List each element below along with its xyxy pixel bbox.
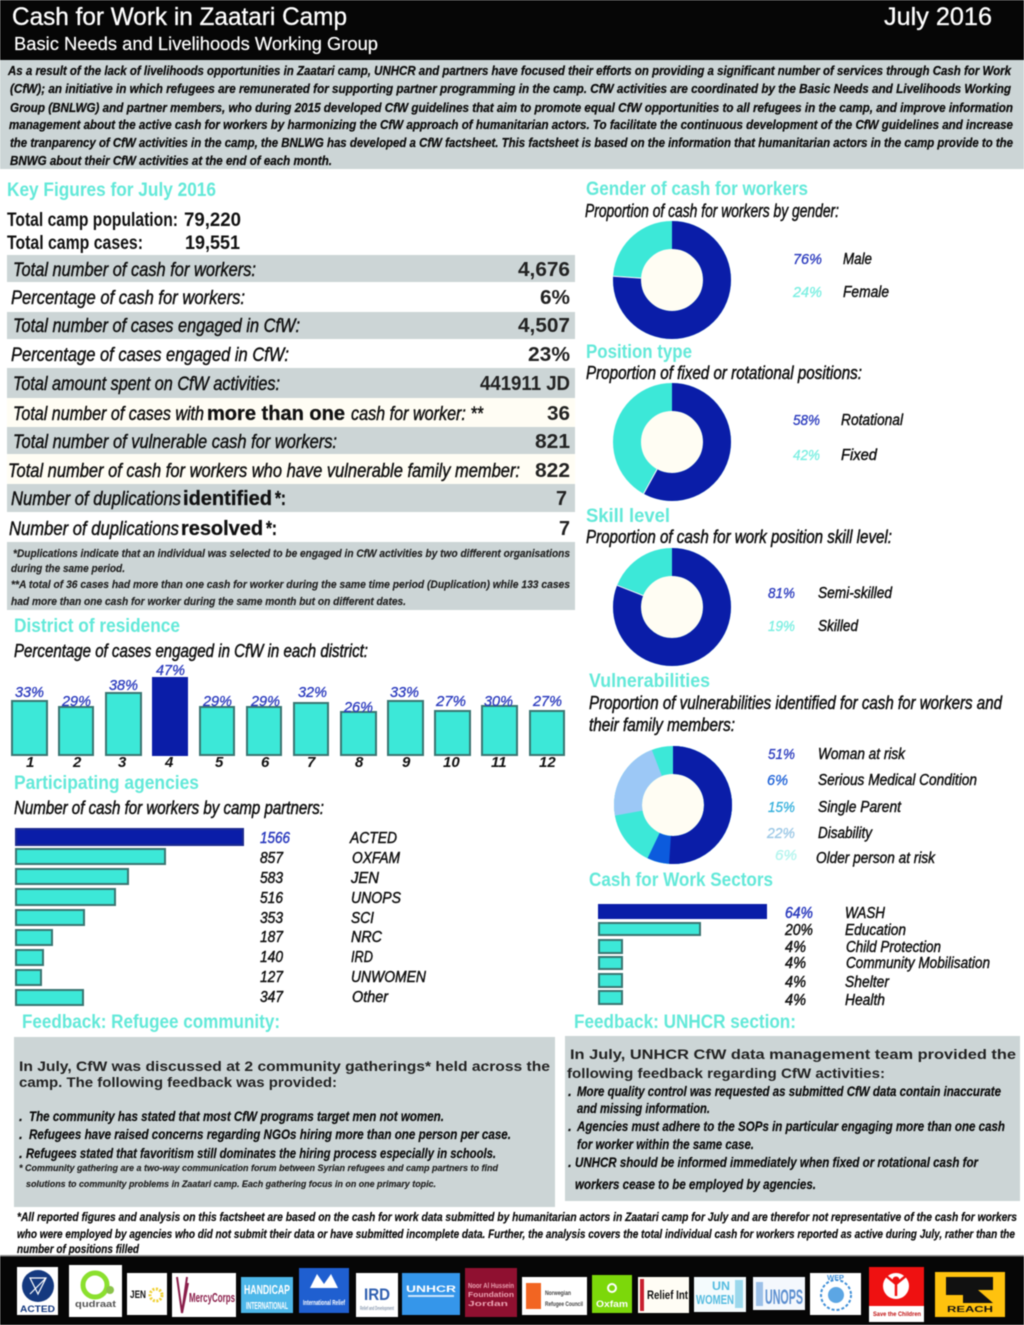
feedback text: refugee community: . [19,1146,23,1161]
panel: refugee community feedback [14,1012,555,1207]
feedback text: refugee community: . [19,1109,23,1124]
legend: position type: Rotational [841,412,903,429]
key figure rows: Percentage of cases engaged in CfW: [11,345,289,366]
bar chart: agencies: Other [352,989,389,1006]
legend: vulnerabilities: Serious Medical Condition [818,772,977,789]
panel: key figures [7,180,575,610]
subheading: vulnerabilities: their family members: [589,715,735,735]
logo: maroon agency: Foundation [468,1292,514,1299]
bar chart: agencies: 857 [260,850,284,867]
bar chart: sectors: Community Mobilisation [846,955,990,972]
heading: gender: Gender of cash for workers [586,179,808,200]
key figure rows: more than one [207,403,345,425]
feedback text: UNHCR section: . [568,1119,572,1134]
logo: Save the Children [869,1267,924,1322]
bar chart: sectors: WASH [845,905,886,922]
logo: UNHCR [402,1273,460,1315]
subheading: agencies chart: Number of cash for workers by camp partners: [14,798,324,818]
heading: skill level: Skill level [586,506,670,527]
panel: UNHCR feedback [565,1012,1020,1201]
logo: ACTED: ACTED [20,1304,56,1314]
key figure rows: Total number of cash for workers who have vulnerable family member: [8,461,520,482]
logo: maroon agency: Noor Al Hussein [468,1283,514,1290]
subtitle: Basic Needs and Livelihoods Working Group [14,34,378,54]
logo: JEN: JEN [130,1289,146,1301]
legend: position type: 42% [793,447,820,464]
bar chart: districts: 30% [484,693,513,710]
subheading: district chart: Percentage of cases engaged in CfW in each district: [14,641,368,661]
bar chart: districts: 27% [532,693,562,710]
feedback text: refugee community: * Community gathering are a two-way communication forum between Syrian refugees and camp partners to find [19,1163,498,1174]
feedback text: UNHCR section: for worker within the same case. [577,1137,754,1152]
panel: introduction [0,60,1024,169]
logo: REACH [935,1272,1005,1317]
legend: vulnerabilities: 15% [768,799,795,816]
bar chart: agencies: 127 [260,969,284,986]
logo: orange square: Norwegian [545,1291,571,1297]
heading: district of residence: District of residence [14,616,180,637]
footnotes: duplications: **A total of 36 cases had more than one cash for worker during the same time period (Duplication) while 133 cases [11,579,570,591]
feedback text: refugee community: camp. The following feedback was provided: [19,1075,337,1090]
key figure rows: Total amount spent on CfW activities: [13,374,280,395]
heading: sectors: Cash for Work Sectors [589,870,773,891]
donut chart: vulnerabilities [628,760,718,850]
key figure rows: identified [183,488,272,510]
key figure rows: 36 [547,403,570,425]
feedback text: UNHCR section: In July, UNHCR CfW data management team provided the [570,1047,1017,1062]
key figure rows: 821 [535,431,570,453]
logo: UN Women: UN [712,1279,730,1293]
bar chart: sectors: 20% [784,922,813,939]
logo: orange square [522,1277,587,1315]
camp totals: Total camp population: [7,210,178,231]
key figure rows: Number of duplications [9,519,179,540]
key figure rows: 4,507 [518,315,570,337]
legend: skill level: 81% [768,585,795,602]
subheading: position type: Proportion of fixed or rotational positions: [586,363,862,383]
logo: ACTED [17,1267,58,1315]
feedback text: UNHCR section: . [568,1084,572,1099]
legend: vulnerabilities: Single Parent [818,799,902,816]
bar chart: sectors: Education [845,922,906,939]
legend: position type: Fixed [841,447,878,464]
bar chart: sectors: Child Protection [846,939,941,956]
logo: REACH: REACH [947,1305,993,1314]
key figure rows: 6% [540,287,570,309]
bar chart: agencies: NRC [351,929,383,946]
bar chart: districts: 27% [435,693,466,710]
feedback text: refugee community [19,1059,551,1190]
key figure rows: 441911 JD [480,373,570,395]
footnotes: duplications: *Duplications indicate that an individual was selected to be engaged in CfW activities by two different organisations [13,548,570,560]
feedback text: UNHCR section: . [568,1155,572,1170]
panel: vulnerabilities [589,671,1003,867]
key figure rows [7,255,575,540]
camp totals: 19,551 [185,233,240,254]
bar chart: districts: 7 [307,754,316,771]
feedback text: refugee community: In July, CfW was discussed at 2 community gatherings* held across the [19,1059,551,1074]
legend: vulnerabilities [766,746,977,867]
legend: vulnerabilities: 6% [767,772,788,789]
key figure rows: Total number of vulnerable cash for workers: [13,432,337,453]
bar chart: districts: 1 [26,754,34,771]
feedback text: refugee community: The community has stated that most CfW programs target men not women. [29,1109,444,1124]
bar chart: agencies: 516 [260,890,283,907]
heading: key figures: Key Figures for July 2016 [7,180,216,201]
key figure rows: resolved [181,518,263,540]
legend: vulnerabilities: 6% [775,847,797,864]
heading: UNHCR feedback: Feedback: UNHCR section: [574,1012,796,1033]
logo: Mercy Corps: MercyCorps [189,1290,235,1305]
feedback text: UNHCR section: following feedback regarding CfW activities: [567,1066,885,1081]
logo: WFP: WFP [827,1275,844,1282]
bar chart: agencies: ACTED [349,830,397,847]
bar chart: districts: 29% [250,693,280,710]
logo: Relief International [638,1277,689,1313]
bar chart: agencies: UNWOMEN [351,969,427,986]
key figure rows: cash for worker: ** [351,404,484,425]
footnotes: duplications: during the same period. [11,563,125,575]
bar chart: agencies: 1566 [260,830,290,847]
bar chart: districts: 12 [539,754,556,771]
bar chart: sectors: Health [845,992,885,1009]
legend: skill level [768,585,893,635]
bar chart: agencies: OXFAM [352,850,400,867]
legend: gender [792,251,889,301]
bar chart: agencies: 187 [260,929,284,946]
camp totals [7,210,241,254]
heading: refugee feedback: Feedback: Refugee community: [22,1012,280,1033]
donut chart: skill level [617,562,717,652]
bar chart: districts: 32% [298,684,327,701]
disclaimer note: number of positions filled [17,1242,140,1256]
key figure rows: *: [275,488,286,510]
legend: vulnerabilities: Older person at risk [816,850,936,867]
subheading: gender: Proportion of cash for workers by gender: [585,201,839,221]
camp totals: Total camp cases: [7,233,143,254]
legend: gender: Female [843,284,889,301]
panel: position type [586,342,903,494]
legend: vulnerabilities: Disability [818,825,873,842]
logo: Oxfam: Oxfam [596,1299,628,1309]
logo: UNOPS: UNOPS [765,1286,803,1309]
key figure rows: 23% [528,344,570,366]
key figure rows: 822 [535,460,570,482]
feedback text: UNHCR section [567,1047,1017,1192]
bar chart: agencies: 140 [260,949,283,966]
legend: gender: Male [843,251,872,268]
logo: blue agency: International Relief [303,1300,345,1307]
donut chart: gender [613,235,717,325]
legend: position type: 58% [793,412,820,429]
key figure rows: 7 [559,518,570,540]
feedback text: refugee community: Refugees have raised concerns regarding NGOs hiring more than one person per case. [29,1127,511,1142]
bar chart: agencies: IRD [351,949,373,966]
bar chart: agencies: 583 [260,870,283,887]
bar chart: districts: 33% [390,684,419,701]
bar chart: agencies: 347 [260,989,284,1006]
legend: position type [793,412,903,464]
camp totals: 79,220 [184,210,241,231]
panel: participating agencies [14,773,427,1006]
logo: blue agency [299,1268,349,1313]
logo: Mercy Corps [172,1273,236,1317]
logo: Oxfam [592,1275,632,1313]
bar chart: sectors: Shelter [845,974,890,991]
feedback text: UNHCR section: workers cease to be employed by agencies. [575,1177,816,1192]
panel: gender [585,179,889,325]
bar chart: districts: 38% [109,677,138,694]
feedback text: UNHCR section: and missing information. [577,1101,710,1116]
logo: Save the Children: Save the Children [873,1312,921,1318]
key figure rows: Total number of cash for workers: [13,260,256,281]
disclaimer note [17,1210,1017,1256]
bar chart: districts: 9 [402,754,411,771]
bar chart: districts: 8 [355,754,364,771]
legend: vulnerabilities: 51% [768,746,795,763]
logo: IRD: IRD [364,1285,390,1304]
logo: Handicap International: HANDICAP [244,1282,290,1297]
header banner [0,0,1024,60]
logo: WFP [810,1273,861,1315]
logo: orange square: Refugee Council [545,1302,583,1308]
bar chart: districts: 3 [118,754,127,771]
bar chart: districts: 2 [72,754,82,771]
bar chart: sectors: 64% [785,905,813,922]
panel: district of residence [12,616,564,771]
bar chart: districts: 4 [164,754,174,771]
bar chart: agencies: JEN [350,870,380,887]
bar chart: agencies: 353 [260,910,283,927]
bar chart: sectors: 4% [785,992,806,1009]
donut chart: position type [627,397,717,494]
heading: participating agencies: Participating agencies [14,773,199,794]
panel: introduction: BNWG about their CfW activities at the end of each month. [10,154,332,168]
key figure rows: Number of duplications [11,489,181,510]
logo: maroon agency: Jordan [468,1301,508,1308]
panel: sectors [589,870,990,1009]
logo: UN Women [694,1277,746,1312]
bar chart: sectors: 4% [785,974,806,991]
logo: Q green [69,1265,122,1317]
feedback text: refugee community: . [19,1127,23,1142]
footer: partner logos [0,1255,1024,1325]
bar chart: sectors: 4% [785,955,806,972]
key figure rows: Total number of cases engaged in CfW: [13,316,300,337]
subheading: skill level: Proportion of cash for work position skill level: [586,527,892,547]
bar chart: sectors: 4% [785,939,806,956]
footnotes: duplications [7,542,575,610]
footnotes: duplications: had more than one cash for worker during the same month but on different dates. [11,596,406,608]
bar chart: districts: 5 [215,754,224,771]
bar chart: districts: 29% [61,693,91,710]
bar chart: districts: 6 [261,754,270,771]
legend: skill level: Semi-skilled [818,585,893,602]
legend: gender: 76% [793,251,822,268]
date: July 2016 [884,3,992,31]
bar chart: districts: 47% [156,662,185,679]
key figure rows: Total number of cases with [13,404,204,425]
bar chart: agencies [16,829,427,1006]
panel: skill level [586,506,893,652]
key figure rows: Percentage of cash for workers: [11,288,245,309]
logo: Q green: qudraat [75,1299,116,1309]
bar chart: districts: 29% [202,693,232,710]
heading: vulnerabilities: Vulnerabilities [589,671,710,692]
logo: UN Women: WOMEN [696,1292,734,1307]
logo: JEN [127,1273,167,1315]
logo: maroon agency [465,1268,517,1317]
logo: IRD [356,1273,398,1317]
logo: Relief International: Relief Int [647,1288,688,1302]
logo: UNOPS [753,1277,805,1310]
bar chart: districts: 33% [15,684,44,701]
bar chart: districts: 11 [491,754,507,771]
key figure rows: 4,676 [518,259,570,281]
title: Cash for Work in Zaatari Camp [12,3,347,31]
key figure rows: 7 [556,488,567,510]
bar chart: districts: 26% [343,699,373,716]
logo: Handicap International: INTERNATIONAL [246,1301,288,1312]
feedback text: refugee community: Refugees stated that favoritism still dominates the hiring process especially in schools. [26,1146,496,1161]
logo: Handicap International [241,1277,293,1313]
feedback text: refugee community: solutions to community problems in Zaatari camp. Each gathering focus in on one primary topic. [26,1179,436,1190]
bar chart: sectors [599,905,990,1009]
heading: position type: Position type [586,342,692,363]
legend: vulnerabilities: Woman at risk [818,746,906,763]
legend: vulnerabilities: 22% [766,825,795,842]
bar chart: agencies: UNOPS [351,890,402,907]
legend: gender: 24% [792,284,822,301]
bar chart: districts: 10 [443,754,460,771]
logo: IRD: Relief and Development [360,1306,394,1312]
subheading: vulnerabilities [589,693,1003,735]
legend: skill level: Skilled [818,618,859,635]
bar chart: agencies: SCI [351,910,375,927]
legend: skill level: 19% [768,618,795,635]
bar chart: districts [12,662,564,771]
key figure rows: *: [266,518,277,540]
logo: UNHCR: UNHCR [406,1284,457,1294]
